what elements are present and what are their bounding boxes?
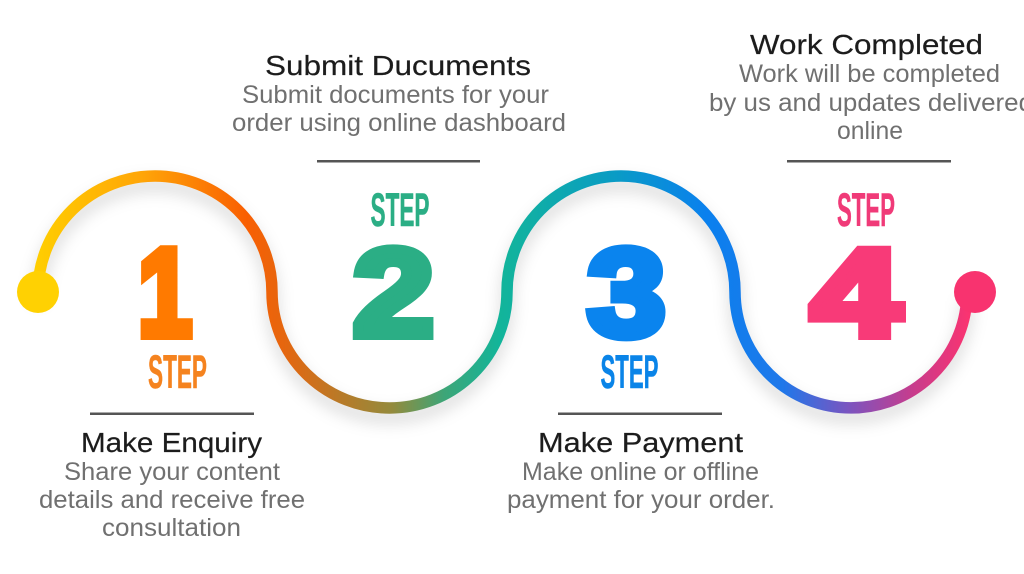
description 1: consultation bbox=[102, 514, 241, 542]
rule 4 bbox=[787, 160, 951, 162]
heading 1: Make Enquiry bbox=[81, 427, 262, 458]
description 2: Submit documents for your bbox=[242, 81, 549, 109]
number 3: 3 bbox=[588, 224, 666, 362]
start dot bbox=[17, 271, 59, 313]
heading 2: Submit Ducuments bbox=[265, 50, 531, 81]
description 4: Work will be completed bbox=[739, 60, 1000, 88]
number 2: 2 bbox=[353, 224, 434, 362]
description 1: Share your content bbox=[64, 458, 280, 486]
step 3 bbox=[507, 224, 775, 514]
step 1: STEP bbox=[148, 345, 207, 398]
description 1 bbox=[39, 458, 305, 542]
description 4: online bbox=[837, 117, 903, 145]
rule 3 bbox=[558, 412, 722, 415]
step 3: STEP bbox=[600, 345, 658, 398]
description 2: order using online dashboard bbox=[232, 109, 566, 137]
wave path shadow bbox=[38, 185, 967, 417]
step 4: STEP bbox=[837, 183, 895, 236]
description 3: Make online or offline bbox=[522, 458, 759, 486]
description 4 bbox=[709, 60, 1024, 145]
description 4: by us and updates delivered bbox=[709, 89, 1024, 117]
description 3: payment for your order. bbox=[507, 486, 775, 514]
number 1: 1 bbox=[138, 224, 192, 362]
step 2 bbox=[232, 50, 566, 362]
heading 3: Make Payment bbox=[538, 427, 743, 458]
description 2 bbox=[232, 81, 566, 137]
step 2: STEP bbox=[370, 183, 430, 236]
step 1 bbox=[39, 224, 305, 542]
wave path bbox=[38, 176, 967, 408]
step 4 bbox=[709, 29, 1024, 362]
heading 4: Work Completed bbox=[750, 29, 983, 60]
number 4: 4 bbox=[811, 224, 901, 362]
end dot bbox=[954, 271, 996, 313]
rule 1 bbox=[90, 412, 254, 415]
description 3 bbox=[507, 458, 775, 514]
rule 2 bbox=[317, 160, 480, 162]
description 1: details and receive free bbox=[39, 486, 305, 514]
